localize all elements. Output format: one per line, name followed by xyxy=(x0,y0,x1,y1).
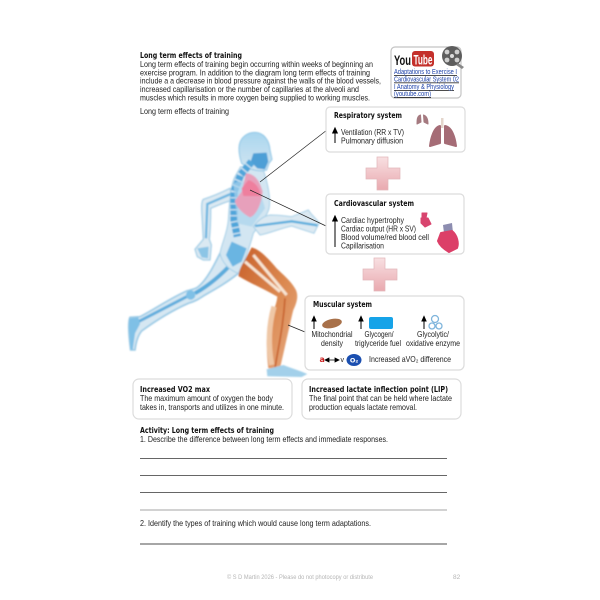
icon: enzyme xyxy=(429,316,442,329)
link text: Cardiovascular System 02 xyxy=(394,76,459,84)
a-v difference row: a xyxy=(320,355,325,364)
labels: density xyxy=(321,338,344,348)
a-v difference row: Increased aVO₂ difference xyxy=(369,354,451,364)
link text xyxy=(394,69,459,98)
figure: running human anatomy xyxy=(129,132,319,377)
labels: oxidative enzyme xyxy=(406,338,460,348)
link text: (youtube.com) xyxy=(394,91,431,98)
icon: plus sign xyxy=(363,258,397,291)
intro paragraph xyxy=(140,59,381,102)
panel: lactate inflection point: The final point that can be held where lactate xyxy=(309,393,452,403)
panel: increased VO2 max: The maximum amount of oxygen the body xyxy=(140,393,274,403)
panel: cardiovascular system xyxy=(326,194,464,254)
intro paragraph: muscles which results in more oxygen being supplied to working muscles. xyxy=(140,92,370,102)
intro text block xyxy=(140,51,381,102)
respiratory list xyxy=(341,127,404,146)
heading: Muscular system xyxy=(313,300,372,309)
icon: large heart xyxy=(438,223,458,252)
arrow up xyxy=(333,128,337,143)
cardiovascular list: Capillarisation xyxy=(341,240,384,250)
panel: lactate inflection point: Increased lactate inflection point (LIP) xyxy=(309,385,448,394)
panel: YouTube link xyxy=(391,46,464,98)
activity section xyxy=(140,426,447,544)
link text: I Anatomy & Physiology xyxy=(394,84,454,91)
panel: lactate inflection point: production equals lactate removal. xyxy=(309,402,417,412)
answer lines xyxy=(140,458,447,510)
panel: respiratory system xyxy=(326,107,465,152)
cardiovascular list: Cardiac hypertrophy xyxy=(341,215,405,225)
front leg muscles xyxy=(238,247,297,368)
link text: Adaptations to Exercise I xyxy=(394,69,457,76)
head xyxy=(239,132,272,171)
panel: increased VO2 max xyxy=(133,379,292,419)
panel: increased VO2 max: Increased VO2 max xyxy=(140,385,210,394)
heading: Respiratory system xyxy=(334,111,402,120)
footer copyright: © S D Martin 2026 - Please do not photocopy or distribute xyxy=(227,573,373,581)
page number: 82 xyxy=(453,574,461,581)
labels: Glycolytic/ xyxy=(417,329,450,339)
icon: large lungs xyxy=(430,118,456,146)
connector: heart to cardiovascular xyxy=(250,190,326,226)
heading: Long term effects of training xyxy=(140,51,242,60)
arrow up xyxy=(333,216,337,247)
panel: muscular system xyxy=(305,296,464,370)
respiratory list: Pulmonary diffusion xyxy=(341,136,403,146)
icon: glycogen cylinder xyxy=(369,317,393,329)
question 2: 2. Identify the types of training which would cause long term adaptations. xyxy=(140,518,371,528)
cardiovascular list: Cardiac output (HR x SV) xyxy=(341,224,416,234)
a-v difference row: v xyxy=(340,357,344,364)
question 1: 1. Describe the difference between long term effects and immediate responses. xyxy=(140,434,388,444)
icon: YouTube logo: Tube xyxy=(414,52,433,68)
back arm xyxy=(195,188,233,260)
back leg xyxy=(129,253,238,350)
diagram caption: Long term effects of training xyxy=(140,106,229,116)
a-v difference row: O₂ xyxy=(350,356,358,364)
activity heading: Activity: Long term effects of training xyxy=(140,426,274,435)
labels xyxy=(312,329,460,348)
answer line xyxy=(140,543,447,545)
connector: lungs to respiratory xyxy=(260,130,327,182)
intro paragraph: Long term effects of training begin occurring within weeks of beginning an xyxy=(140,59,373,69)
labels: Mitochondrial xyxy=(312,329,353,339)
respiratory list: Ventilation (RR x TV) xyxy=(341,127,404,137)
labels: triglyceride fuel xyxy=(355,338,401,348)
icon: plus sign xyxy=(366,157,400,190)
panel: lactate inflection point xyxy=(302,379,461,419)
icon: film reel xyxy=(442,46,464,69)
front foot xyxy=(267,365,307,377)
panel: increased VO2 max: takes in, transports and utilizes in one minute. xyxy=(140,402,284,412)
arrows up xyxy=(312,316,426,329)
lungs xyxy=(235,173,263,217)
heading: Cardiovascular system xyxy=(334,199,414,208)
cardiovascular list xyxy=(341,215,429,250)
labels: Glycogen/ xyxy=(364,329,394,339)
icon: small heart xyxy=(421,213,431,227)
connector: leg to muscular xyxy=(288,325,305,332)
intro paragraph: exercise program. In addition to the diagram long term effects of training xyxy=(140,67,370,77)
front arm xyxy=(253,210,319,235)
a-v difference row xyxy=(320,354,451,366)
icon: YouTube logo: You xyxy=(394,52,411,68)
intro paragraph: include a a decrease in blood pressure against the walls of the blood vessels, xyxy=(140,76,381,86)
icon: mitochondrion xyxy=(321,317,343,330)
torso xyxy=(220,167,270,273)
intro paragraph: increased capillarisation or the number of capillaries at the alveoli and xyxy=(140,84,359,94)
icon: small lungs xyxy=(417,115,428,124)
icon: YouTube logo xyxy=(394,51,434,68)
cardiovascular list: Blood volume/red blood cell xyxy=(341,232,429,242)
spine and pelvis xyxy=(226,162,265,267)
